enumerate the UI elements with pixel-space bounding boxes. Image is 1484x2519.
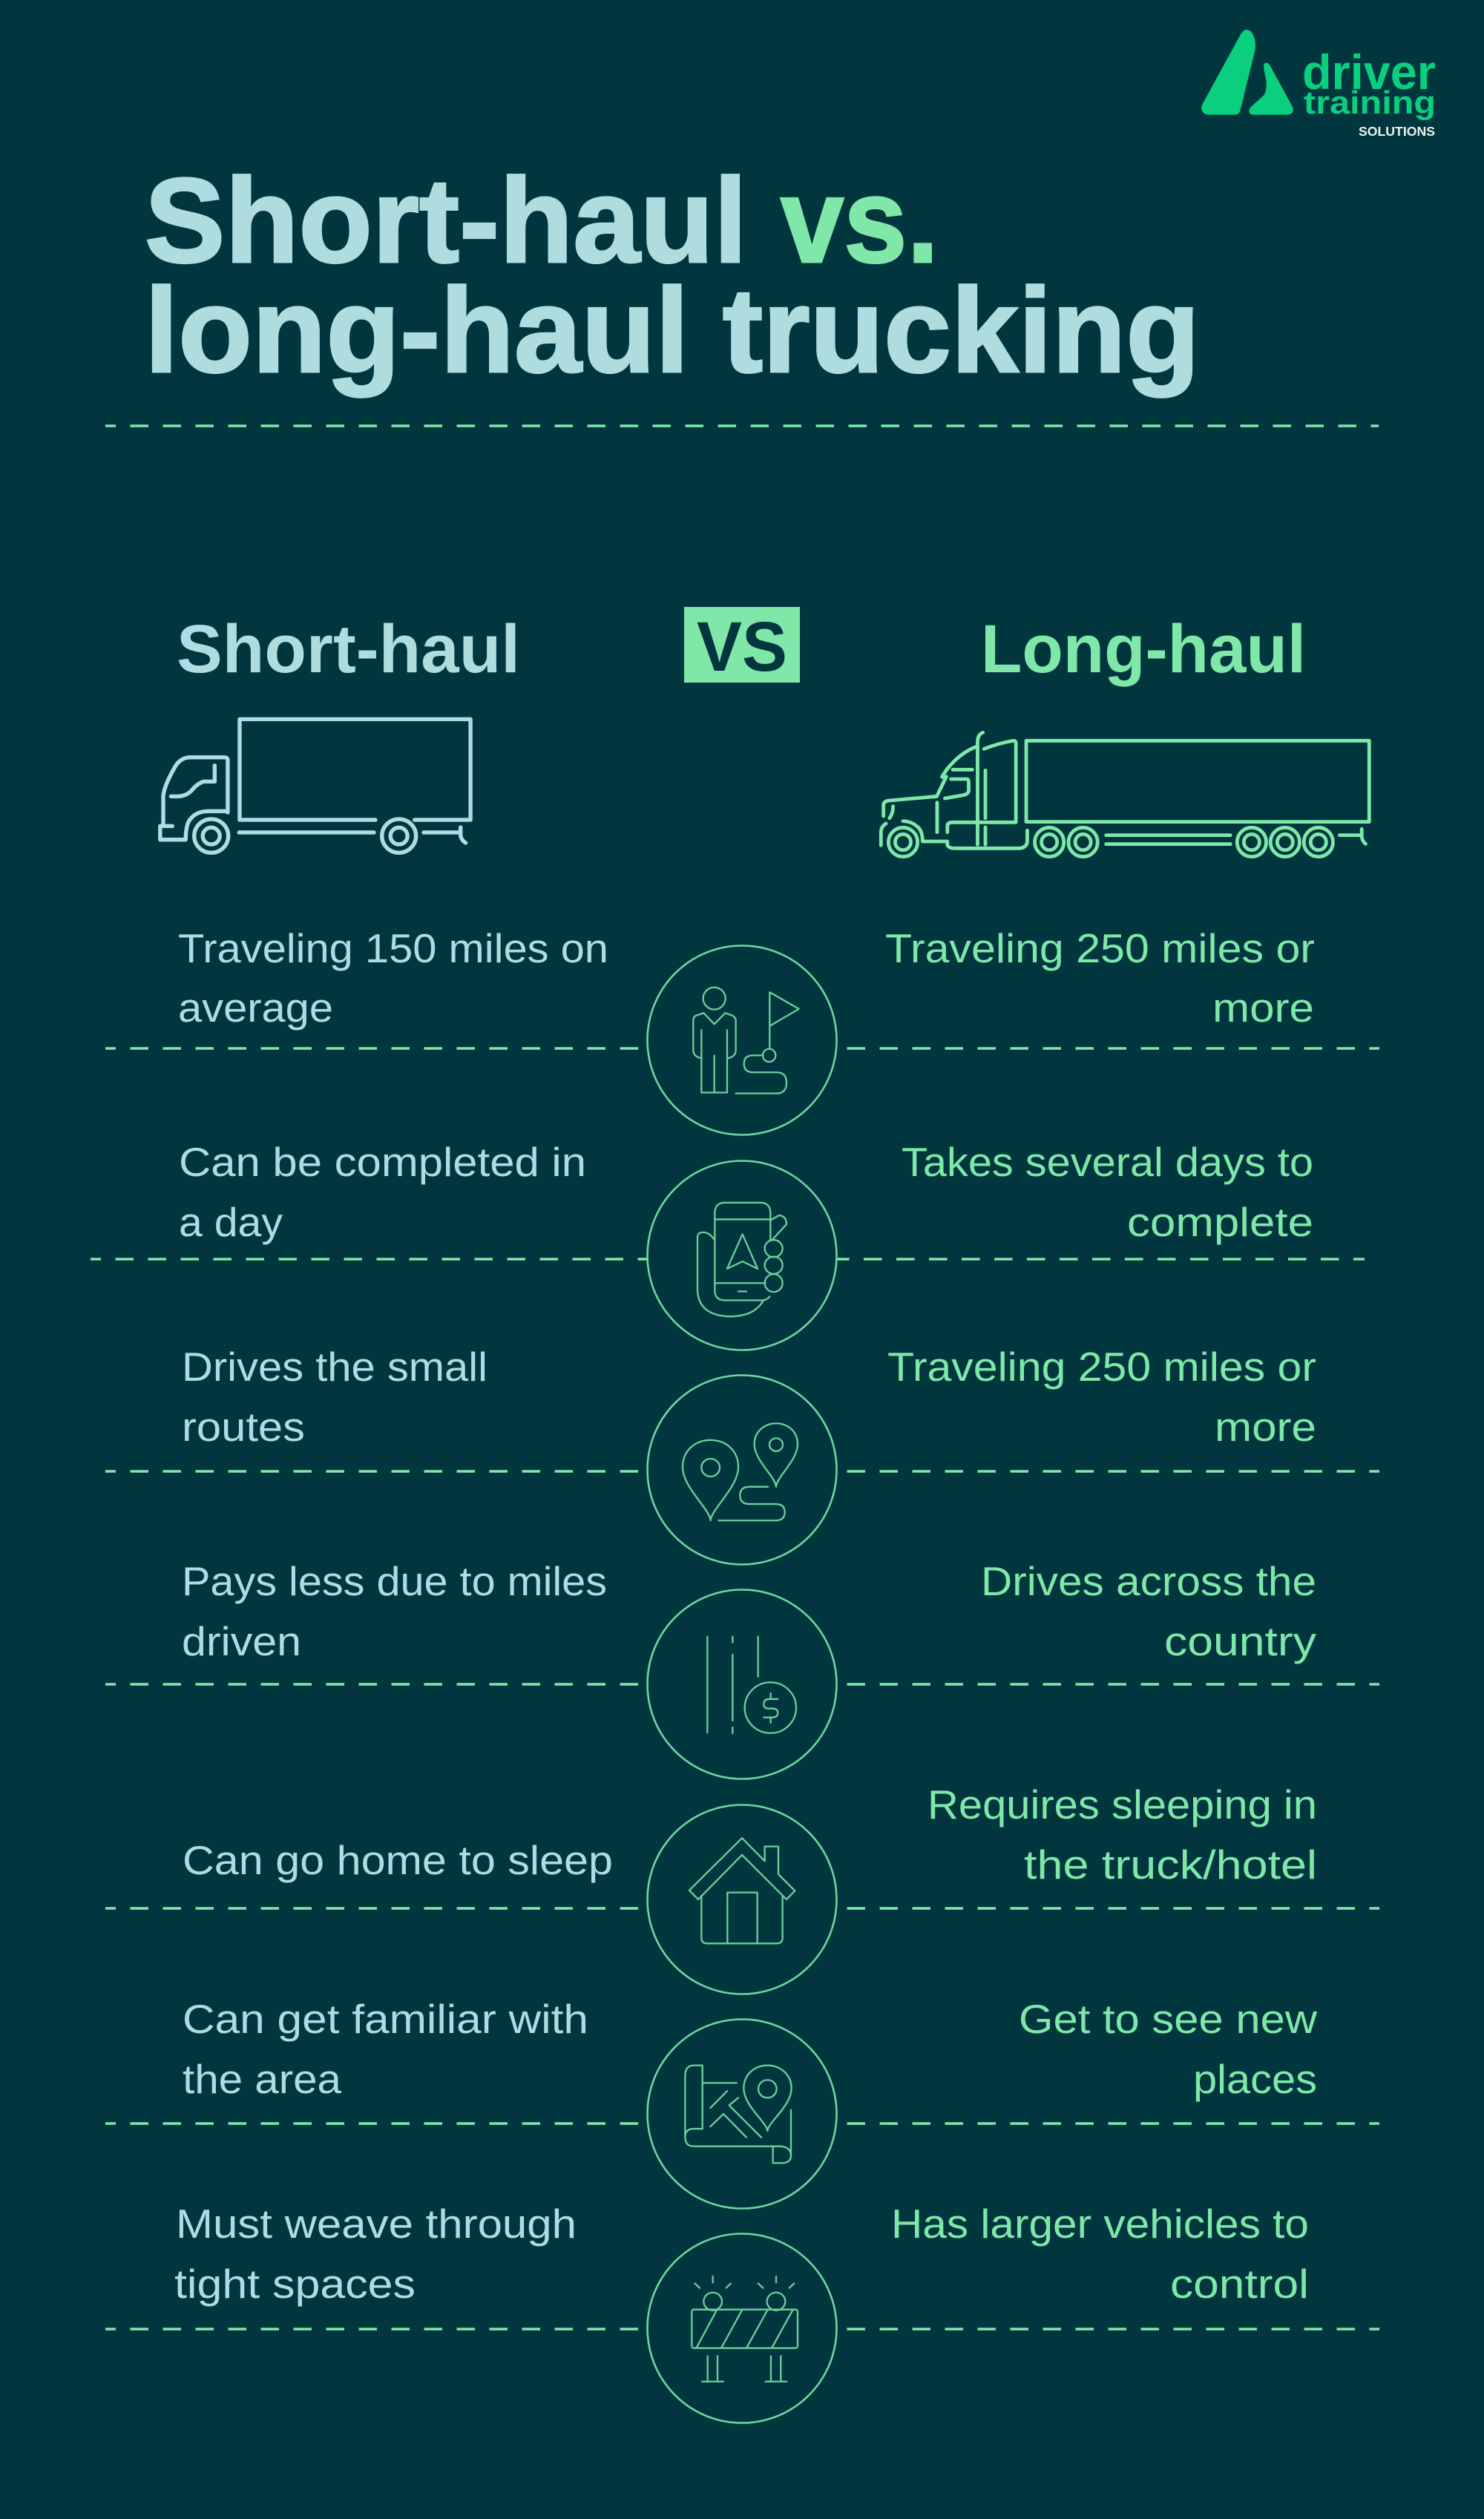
left text: short-haul routes <box>182 1344 487 1450</box>
right text: long-haul coverage: Drives across the <box>981 1558 1316 1604</box>
logo wordmark <box>1302 45 1436 139</box>
title <box>145 154 1200 398</box>
left text: short-haul time: a day <box>179 1199 283 1245</box>
right text: long-haul distance: more <box>1212 985 1314 1031</box>
right text: long-haul time: Takes several days to <box>902 1139 1313 1185</box>
right text: long-haul sleep: the truck/hotel <box>1024 1842 1317 1888</box>
row 4: pay <box>105 1558 1379 1779</box>
right text: long-haul new places: places <box>1193 2056 1317 2102</box>
heading: long-haul: Long-haul <box>981 611 1306 687</box>
row 6: familiarity <box>105 1996 1379 2208</box>
right text: long-haul distance repeated: Traveling 250 miles or <box>887 1344 1316 1390</box>
row 3: routes <box>105 1344 1379 1564</box>
icon: short-haul truck <box>160 719 470 853</box>
right text: long-haul coverage: country <box>1164 1618 1317 1664</box>
icon: person and flag route <box>647 945 837 1135</box>
left text: short-haul pay: driven <box>182 1618 301 1664</box>
left text: short-haul tight spaces: tight spaces <box>174 2261 416 2307</box>
left text: short-haul familiarity <box>183 1996 588 2102</box>
left text: short-haul tight spaces: Must weave through <box>176 2201 577 2247</box>
title: long-haul trucking <box>145 263 1200 398</box>
title: Short-haul <box>145 154 747 288</box>
right text: long-haul sleep: Requires sleeping in <box>928 1781 1317 1827</box>
right text: long-haul distance <box>885 925 1315 1031</box>
right text: long-haul vehicle size: control <box>1170 2261 1309 2307</box>
right text: long-haul time: complete <box>1127 1199 1313 1245</box>
right text: long-haul sleep <box>928 1781 1317 1888</box>
left text: short-haul familiarity: the area <box>183 2056 341 2102</box>
title: vs. <box>781 154 939 288</box>
row 2: time <box>91 1139 1365 1350</box>
icon: map with pin <box>647 2020 837 2208</box>
left text: short-haul pay: Pays less due to miles <box>182 1558 607 1604</box>
right text: long-haul time <box>902 1139 1313 1245</box>
badge: VS: VS <box>697 608 787 686</box>
left text: short-haul time: Can be completed in <box>179 1139 586 1185</box>
right text: long-haul distance repeated <box>887 1344 1316 1450</box>
logo wordmark: SOLUTIONS <box>1359 124 1435 139</box>
left text: short-haul distance: Traveling 150 miles on <box>178 925 608 971</box>
logo: driver training solutions <box>1201 30 1436 139</box>
left text: short-haul tight spaces <box>174 2201 577 2307</box>
logo wordmark: training <box>1304 85 1436 121</box>
left text: short-haul time <box>179 1139 586 1245</box>
logo mark <box>1201 30 1293 115</box>
row 1: distance <box>105 925 1379 1135</box>
left text: short-haul familiarity: Can get familiar with <box>183 1996 588 2042</box>
left text: short-haul distance: average <box>178 985 333 1031</box>
icon: road with dollar coin <box>647 1589 837 1779</box>
right text: long-haul vehicle size <box>891 2201 1309 2307</box>
icon: phone navigation in hand <box>647 1160 837 1350</box>
heading: short-haul: Short-haul <box>177 611 520 687</box>
icon: house <box>647 1804 837 1994</box>
left text: short-haul routes: routes <box>182 1404 305 1450</box>
left text: short-haul sleep: Can go home to sleep <box>183 1837 613 1883</box>
left text: short-haul pay <box>182 1558 607 1664</box>
right text: long-haul coverage <box>981 1558 1317 1664</box>
right text: long-haul distance repeated: more <box>1215 1404 1316 1450</box>
row 5: sleep <box>105 1781 1379 1994</box>
right text: long-haul new places <box>1019 1996 1317 2102</box>
right text: long-haul vehicle size: Has larger vehicles to <box>891 2201 1309 2247</box>
row 7: manoeuvring <box>105 2201 1379 2423</box>
left text: short-haul routes: Drives the small <box>182 1344 487 1390</box>
icon: road barrier with lamps <box>647 2233 837 2423</box>
right text: long-haul new places: Get to see new <box>1019 1996 1317 2042</box>
left text: short-haul distance <box>178 925 608 1031</box>
right text: long-haul distance: Traveling 250 miles or <box>885 925 1315 971</box>
logo wordmark: driver <box>1302 45 1436 99</box>
icon: long-haul truck <box>881 732 1369 857</box>
icon: two map pins and road <box>647 1376 837 1564</box>
